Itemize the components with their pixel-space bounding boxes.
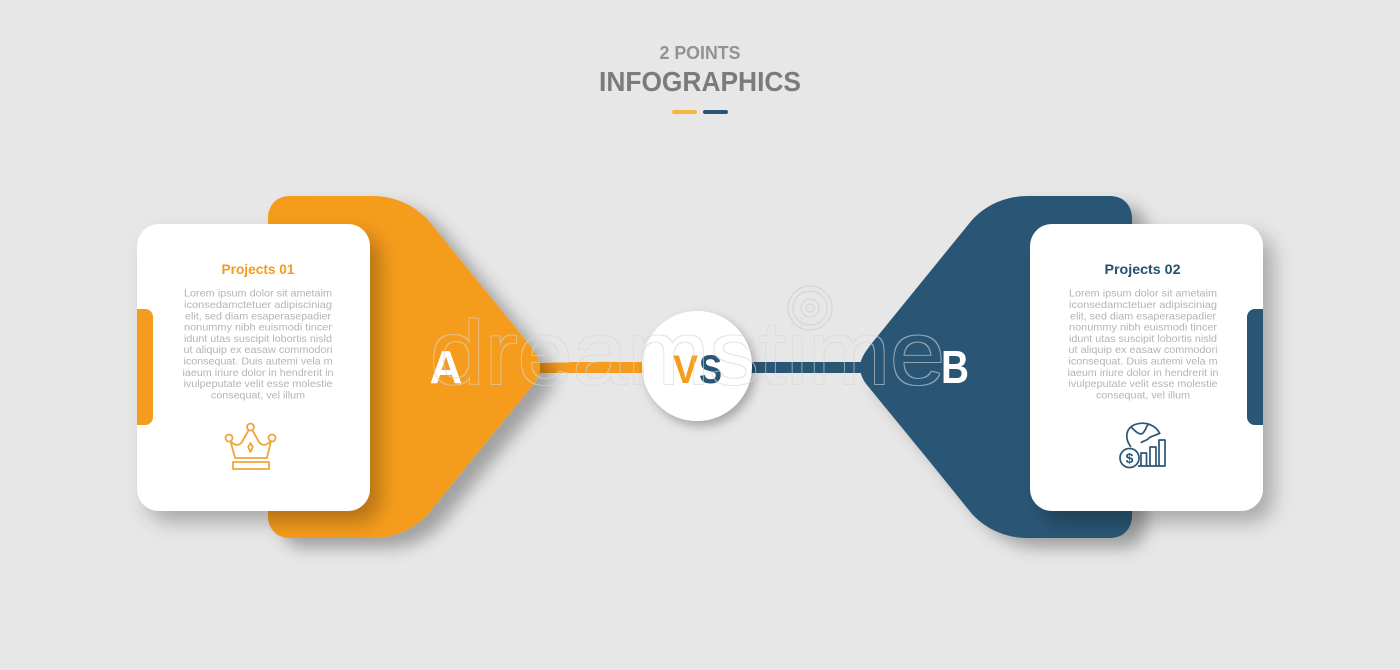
card text: elit, sed diam esaperasepadier	[185, 311, 332, 322]
icon: globe with dollar coin and bar chart	[1120, 423, 1165, 468]
panel: B arrow shape	[860, 196, 1132, 538]
card text	[1068, 288, 1218, 402]
title accent: orange	[672, 110, 697, 114]
card text: ivulpeputate velit esse molestie	[1068, 379, 1218, 390]
card text: idunt utas suscipit lobortis nisld	[1069, 334, 1217, 345]
VS badge	[642, 311, 752, 421]
icon: globe with dollar coin and bar chart: $	[1126, 450, 1134, 466]
letter A: A	[430, 341, 462, 393]
card text: elit, sed diam esaperasepadier	[1070, 311, 1217, 322]
card text: ut aliquip ex easaw commodori	[1068, 345, 1218, 356]
V letter: V	[673, 348, 698, 392]
icon: crown	[226, 424, 276, 469]
connector: blue	[748, 362, 868, 373]
subtitle: 2 POINTS	[660, 43, 740, 63]
S letter: S	[699, 348, 722, 392]
card text: nonummy nibh euismodi tincer	[1069, 322, 1218, 334]
connector: orange	[530, 362, 646, 373]
title accent: blue	[703, 110, 728, 114]
panel: A arrow shape	[268, 196, 540, 538]
card text: consequat, vel illum	[1096, 390, 1190, 402]
card text: nonummy nibh euismodi tincer	[184, 322, 333, 334]
card heading: Projects 01	[222, 261, 295, 277]
panel: card 02	[1030, 224, 1263, 511]
card text: iconsequat. Duis autemi vela m	[184, 356, 332, 368]
watermark	[430, 286, 945, 404]
panel: card 01	[137, 224, 370, 511]
card text: iconsequat. Duis autemi vela m	[1068, 356, 1218, 368]
watermark spiral	[788, 286, 832, 330]
card text: iaeum iriure dolor in hendrerit in	[1068, 368, 1218, 379]
card text: ut aliquip ex easaw commodori	[184, 345, 332, 356]
card heading: Projects 02	[1104, 261, 1181, 277]
card text: consequat, vel illum	[211, 390, 305, 402]
side tab	[137, 309, 153, 425]
card text	[182, 288, 334, 402]
side tab	[1247, 309, 1263, 425]
card text: iaeum iriure dolor in hendrerit in	[182, 368, 334, 379]
card text: ivulpeputate velit esse molestie	[184, 379, 333, 390]
card text: Lorem ipsum dolor sit ametaim	[184, 288, 332, 300]
card body	[1030, 224, 1263, 511]
title block	[599, 43, 801, 114]
card text: idunt utas suscipit lobortis nisld	[184, 334, 332, 345]
badge circle	[642, 311, 752, 421]
card text: Lorem ipsum dolor sit ametaim	[1069, 288, 1217, 300]
card text: iconsedamctetuer adipisciniag	[184, 300, 332, 311]
title: INFOGRAPHICS	[599, 66, 801, 97]
letter B: B	[941, 341, 969, 393]
card body	[137, 224, 370, 511]
card text: iconsedamctetuer adipisciniag	[1069, 300, 1217, 311]
watermark wordmark: dreamstime	[430, 304, 945, 404]
